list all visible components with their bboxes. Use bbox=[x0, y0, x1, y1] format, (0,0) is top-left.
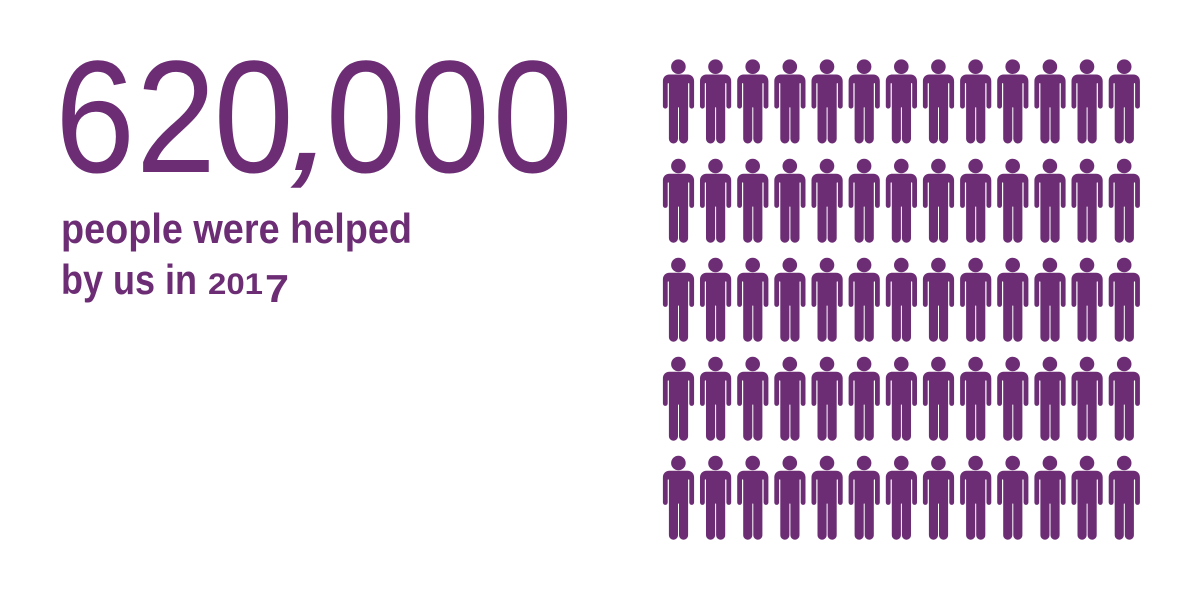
row 5 of people bbox=[663, 456, 1140, 540]
headline number: 000 bbox=[326, 28, 573, 207]
subheading text: 201 bbox=[208, 268, 263, 301]
row 1 of people bbox=[663, 59, 1140, 143]
subheading text: by us in bbox=[61, 256, 197, 303]
subheading text bbox=[61, 205, 412, 311]
row 2 of people bbox=[663, 159, 1140, 243]
subheading text: people were helped bbox=[61, 205, 412, 252]
headline number bbox=[55, 28, 573, 207]
pictogram grid of people icons bbox=[663, 59, 1140, 540]
headline number: , bbox=[281, 66, 345, 195]
row 4 of people bbox=[663, 357, 1140, 441]
subheading text: 7 bbox=[265, 268, 289, 311]
row 3 of people bbox=[663, 258, 1140, 342]
headline number: 620 bbox=[55, 28, 294, 207]
